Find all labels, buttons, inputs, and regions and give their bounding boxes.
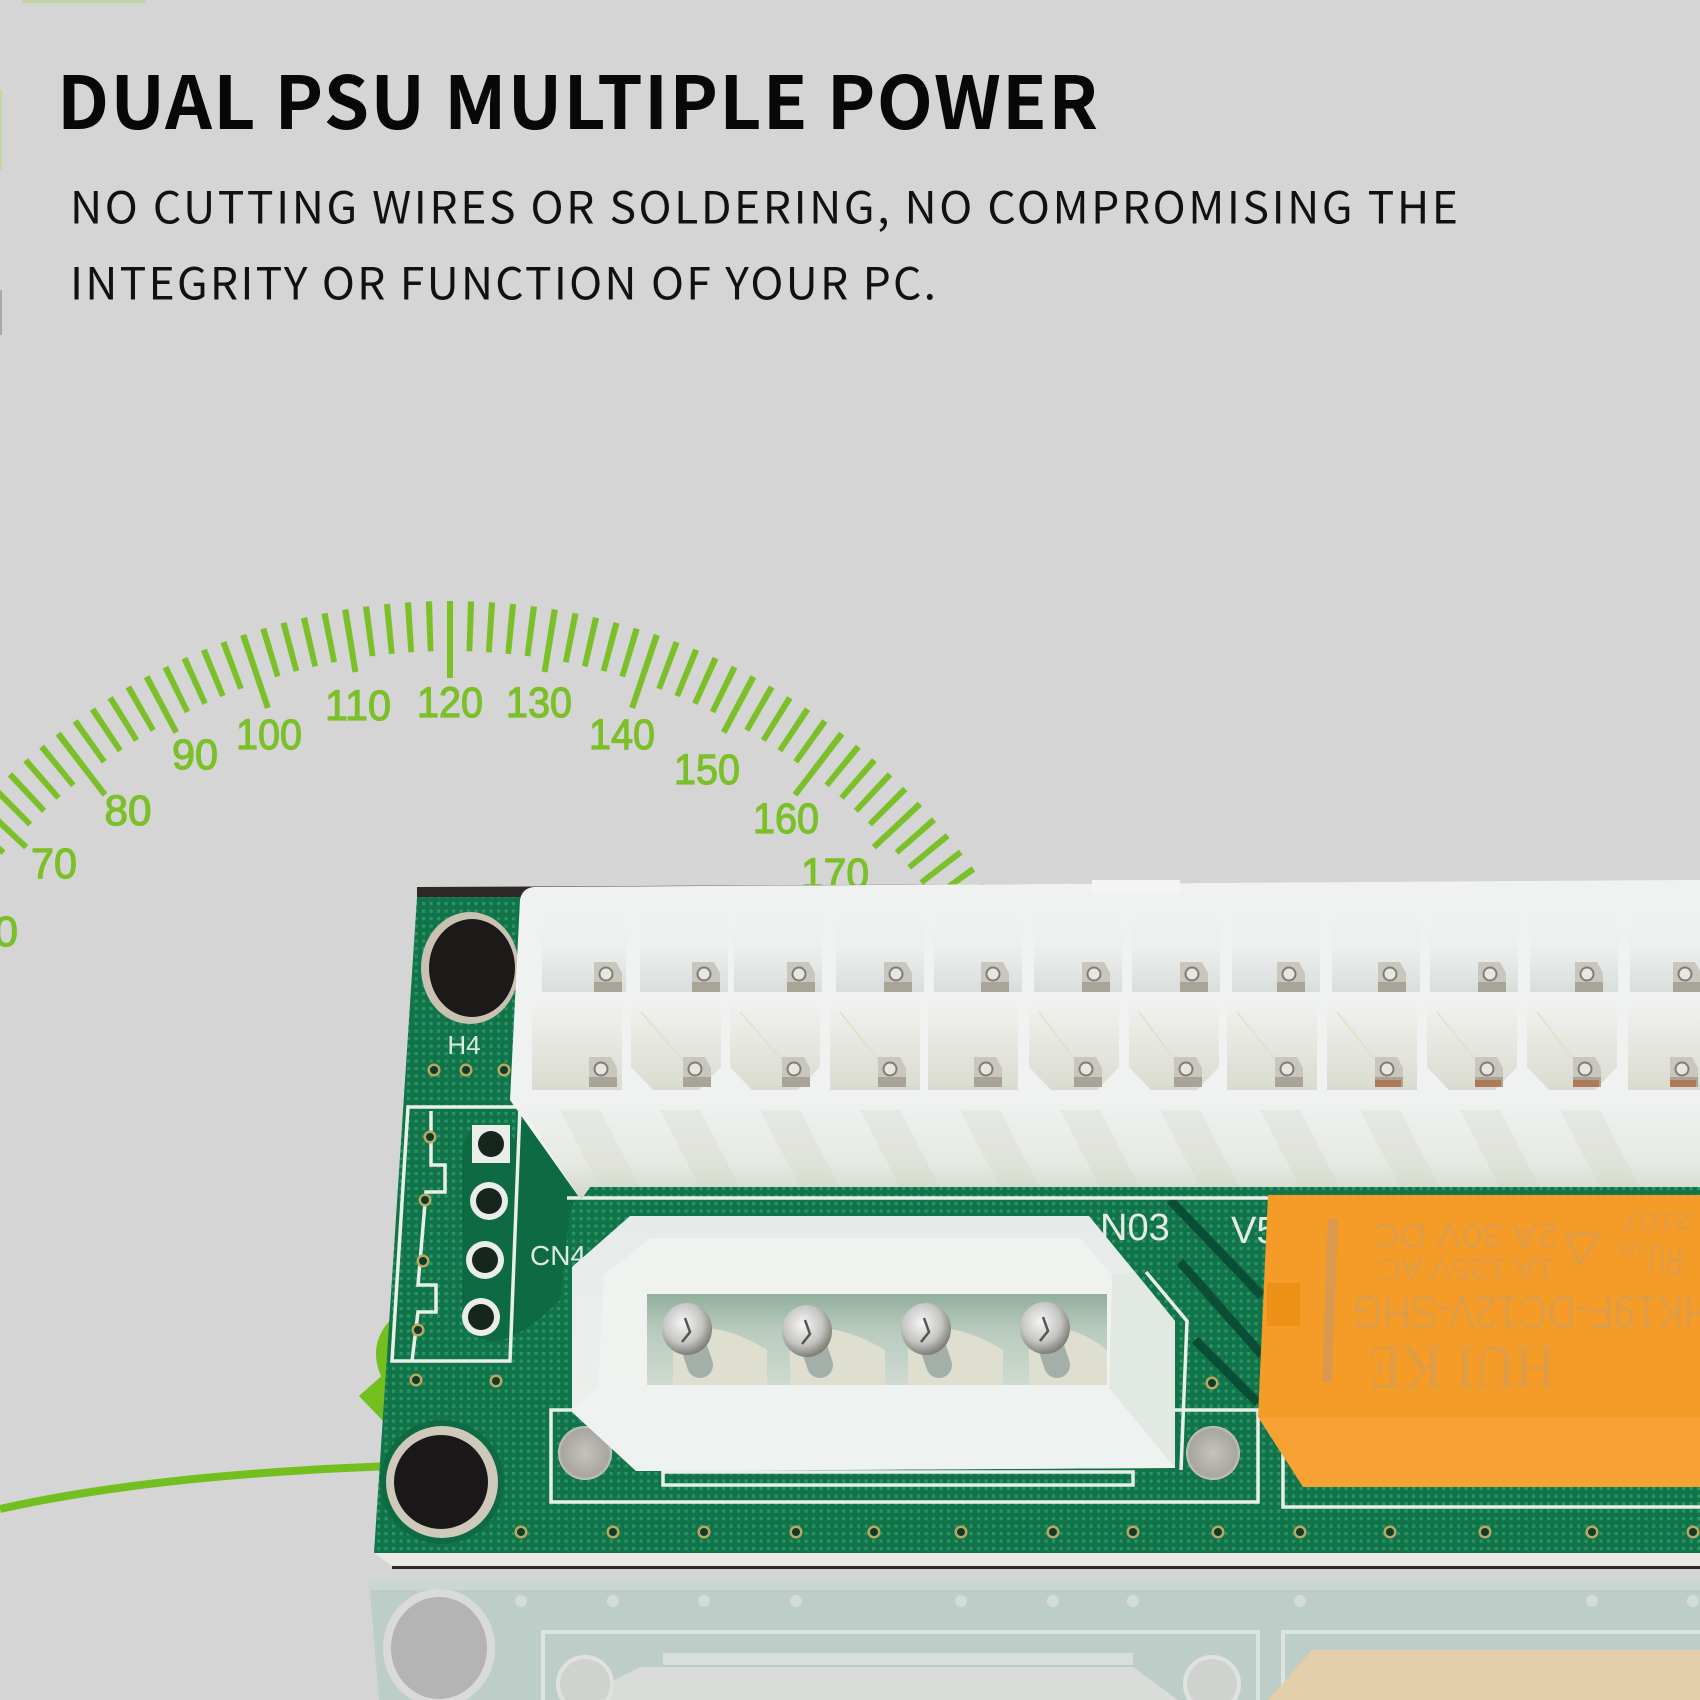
reflected pads bbox=[558, 1657, 612, 1700]
mounting hole bottom left bbox=[386, 1426, 498, 1538]
relay engraved markings bbox=[1355, 1213, 1700, 1388]
board reflection bbox=[369, 1581, 1700, 1700]
4-pin molex connector bbox=[572, 1216, 1175, 1471]
24-pin ATX connector bbox=[510, 880, 1700, 1200]
gauge scale numbers: 80 bbox=[104, 787, 152, 835]
subtitle text block bbox=[70, 172, 1458, 312]
molex opening bbox=[598, 1238, 1112, 1388]
connector housing bbox=[510, 880, 1700, 1200]
reflected relay bbox=[1268, 1650, 1700, 1700]
label N03: N03 bbox=[1100, 1207, 1170, 1249]
gauge major ticks bbox=[0, 610, 920, 847]
gauge scale numbers: 130 bbox=[506, 679, 572, 727]
pin heads bbox=[662, 1302, 1070, 1357]
gauge scale numbers: 150 bbox=[674, 746, 740, 794]
subtitle line 2: INTEGRITY OR FUNCTION OF YOUR PC. bbox=[70, 248, 936, 312]
gauge scale numbers: 120 bbox=[417, 679, 483, 727]
diagonal copper stripes bbox=[1170, 1200, 1262, 1403]
subtitle line 1: NO CUTTING WIRES OR SOLDERING, NO COMPROMISING THE bbox=[70, 172, 1458, 236]
small vias bbox=[410, 1064, 1700, 1538]
gauge scale numbers: 90 bbox=[172, 731, 218, 779]
lower socket highlight lines bbox=[641, 1012, 1580, 1068]
molex housing bbox=[572, 1216, 1175, 1471]
label V5: V5 bbox=[1231, 1210, 1277, 1252]
mounting hole H4 bbox=[421, 912, 519, 1024]
relay brand: HUI KE bbox=[1368, 1333, 1555, 1401]
connector front lip bbox=[515, 1098, 1700, 1200]
green gauge needle and curve bbox=[0, 1318, 392, 1509]
molex front lip bbox=[572, 1388, 1175, 1471]
brown pin bases bbox=[1375, 1080, 1696, 1087]
gauge scale numbers: 110 bbox=[325, 682, 391, 730]
lip shading bbox=[560, 1110, 1640, 1187]
title: DUAL PSU MULTIPLE POWER bbox=[57, 45, 1098, 151]
relay RU mark: RU bbox=[1648, 1237, 1683, 1284]
pcb bottom dark line bbox=[392, 1566, 1700, 1569]
relay triangle mark bbox=[1567, 1233, 1600, 1264]
pcb green body bbox=[374, 897, 1700, 1553]
pin head solder marks bbox=[682, 1317, 1048, 1344]
pcb top edge bbox=[417, 881, 1700, 900]
silkscreen outlines bbox=[392, 1107, 1700, 1507]
four-pin header holes bbox=[462, 1125, 510, 1336]
upper row pins bbox=[594, 962, 1700, 992]
edge remnants bbox=[0, 0, 146, 335]
gauge scale numbers: 70 bbox=[31, 840, 77, 888]
lower row pins bbox=[589, 1057, 1698, 1087]
gauge scale numbers: 100 bbox=[236, 711, 302, 759]
circuit board bbox=[374, 881, 1700, 1569]
orange relay bbox=[1258, 1195, 1700, 1487]
relay rating DC: 2A 30V DC bbox=[1372, 1217, 1558, 1254]
relay model: HK19F-DC12V-SHG bbox=[1352, 1286, 1700, 1338]
gauge scale numbers bbox=[0, 679, 869, 956]
reflection panel bbox=[369, 1581, 1700, 1700]
lower pin row sockets bbox=[532, 1005, 1700, 1090]
relay top face bbox=[1258, 1195, 1700, 1417]
speedometer gauge bbox=[0, 610, 987, 956]
relay rating AC: 1A 125V AC bbox=[1377, 1252, 1555, 1284]
pcb bottom white edge bbox=[374, 1553, 1700, 1566]
upper pin row sockets bbox=[542, 905, 1700, 992]
label H4: H4 bbox=[447, 1030, 481, 1060]
gauge scale numbers: 140 bbox=[589, 711, 655, 759]
relay engraved bar bbox=[1322, 1219, 1338, 1382]
gauge short ticks bbox=[0, 626, 987, 936]
dark tracks bbox=[380, 1120, 620, 1544]
pin stems bbox=[690, 1335, 1057, 1365]
reflected molex connector bbox=[575, 1667, 1178, 1700]
gauge scale numbers: 170 bbox=[801, 850, 869, 898]
label CN4: CN4 bbox=[530, 1240, 586, 1271]
reflected silkscreen bbox=[543, 1632, 1700, 1700]
relay date code: 2107 bbox=[1622, 1207, 1693, 1234]
molex right side face bbox=[1109, 1272, 1175, 1468]
reflected mounting hole bbox=[387, 1593, 491, 1700]
relay notch bbox=[1267, 1283, 1300, 1326]
solder pads bbox=[558, 1426, 1240, 1480]
molex back wall bbox=[647, 1294, 1107, 1385]
relay us mark: us bbox=[1618, 1238, 1641, 1263]
pin bases bbox=[673, 1328, 1107, 1385]
gauge scale numbers: 160 bbox=[753, 795, 819, 843]
relay front face bbox=[1258, 1417, 1700, 1487]
reflected vias bbox=[515, 1595, 1699, 1607]
